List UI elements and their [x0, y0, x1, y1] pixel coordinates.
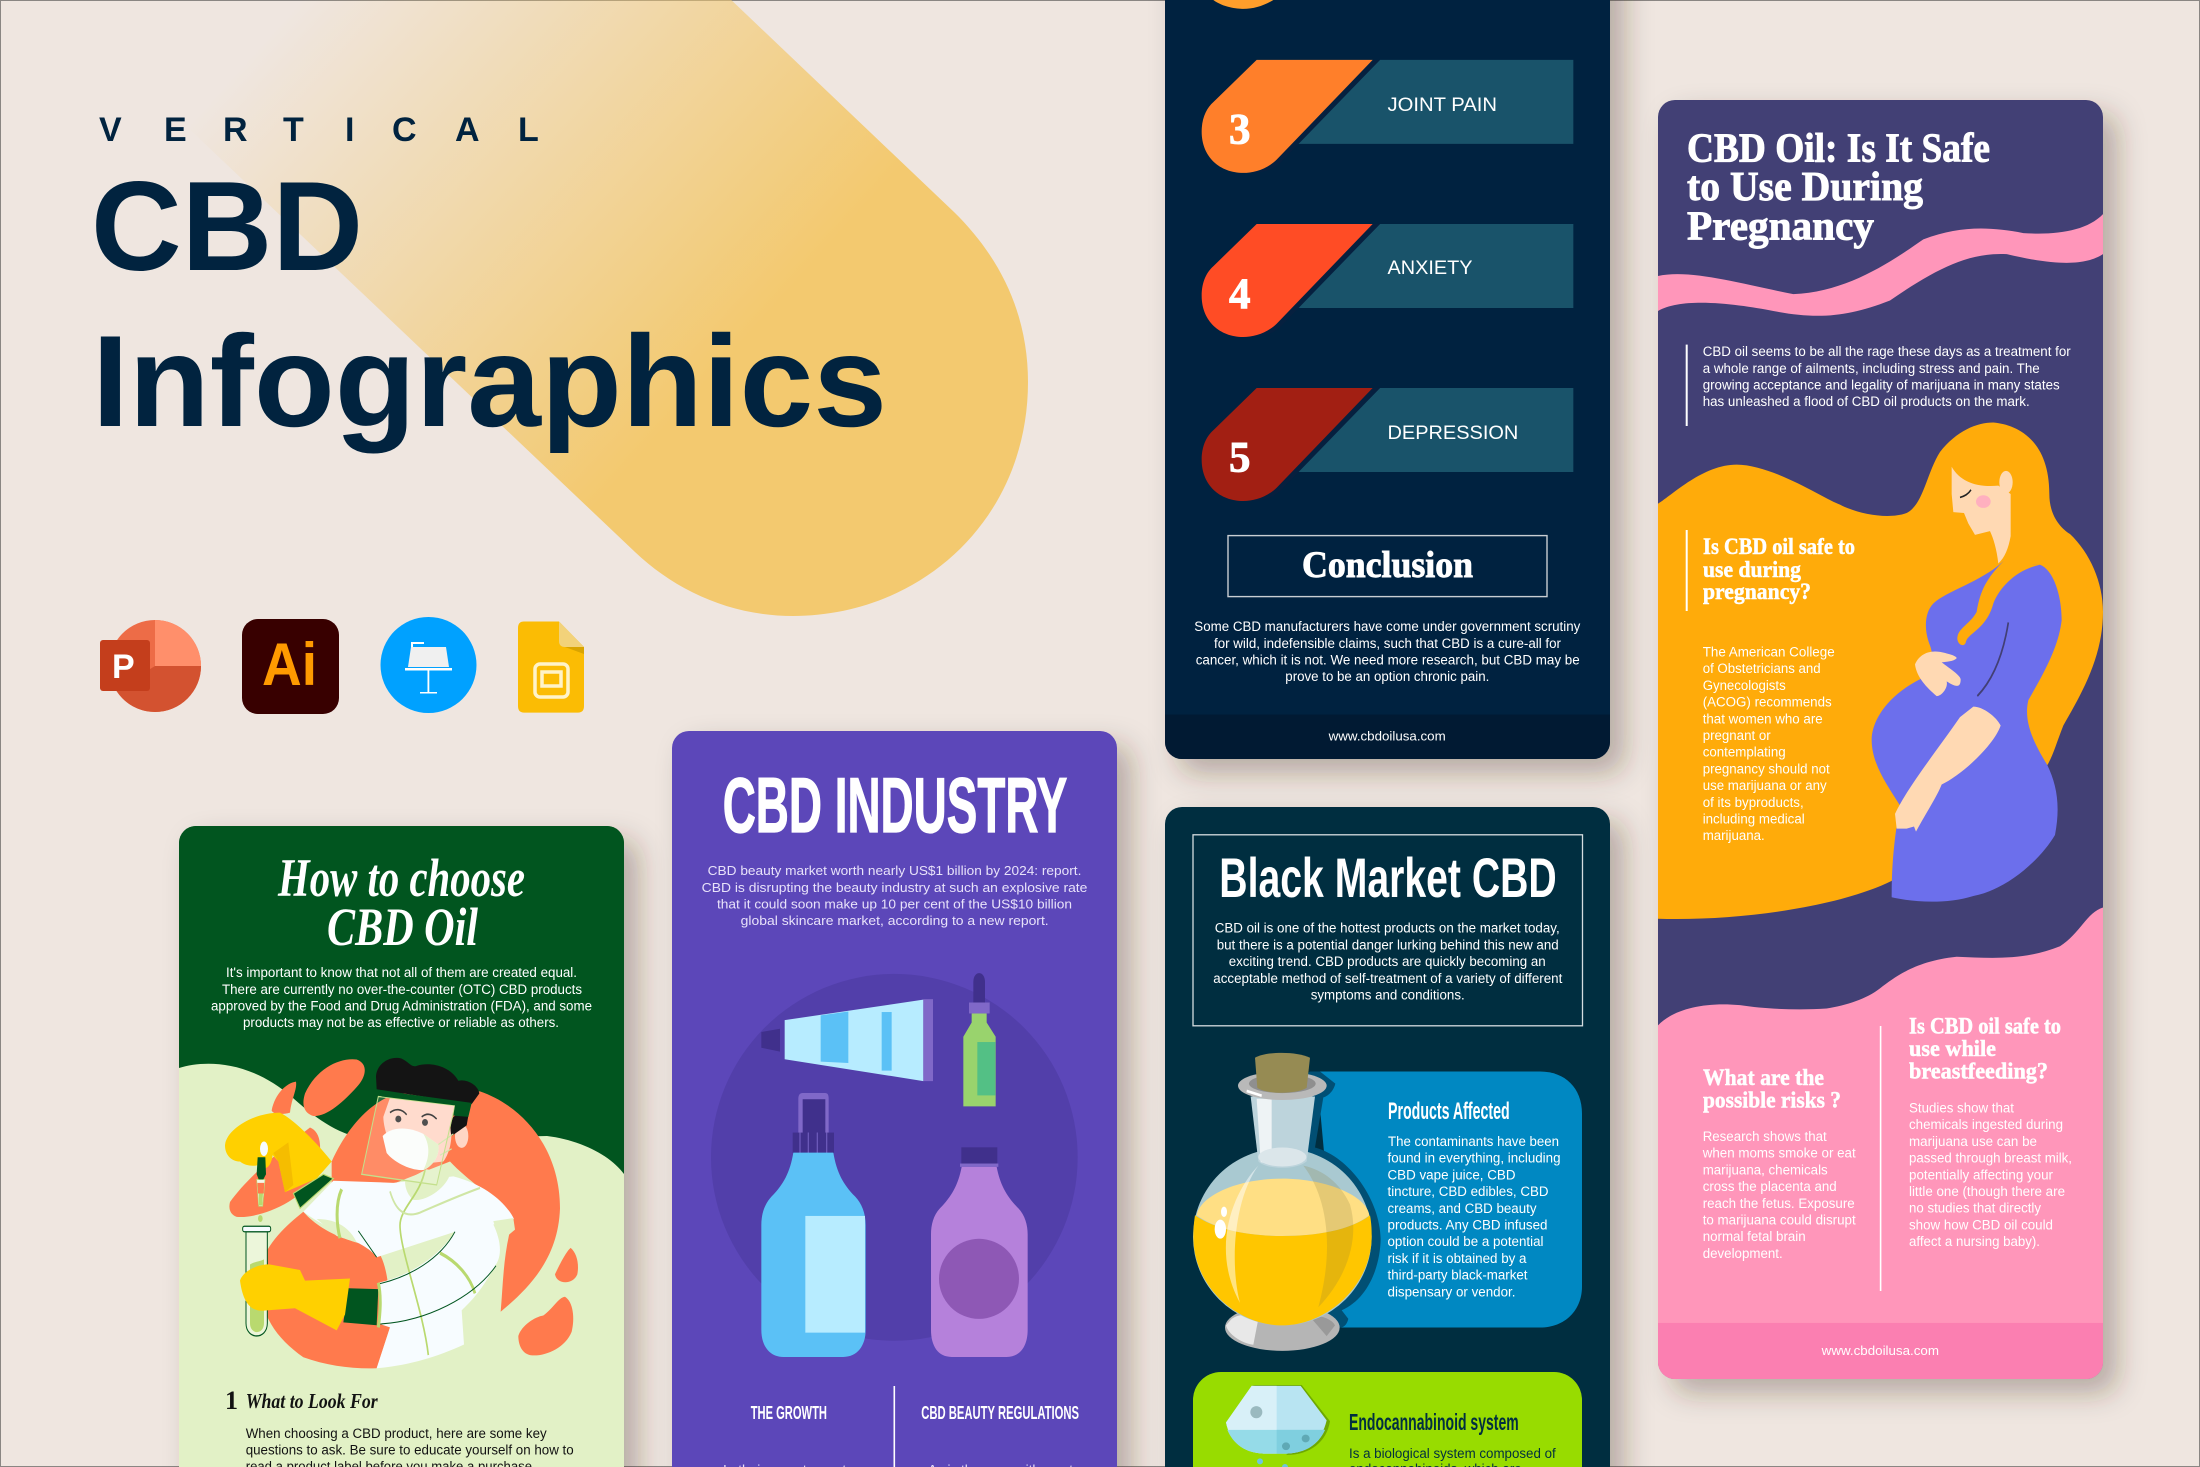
section text: When choosing a CBD product, here are some key [246, 1426, 547, 1441]
icon: PowerPoint [100, 620, 201, 712]
label: joint pain: JOINT PAIN [1388, 95, 1497, 116]
products affected text: dispensary or vendor. [1388, 1284, 1516, 1299]
intro text: global skincare market, according to a new report. [741, 913, 1049, 928]
column: possible risks: What are the [1703, 1065, 1824, 1090]
heading: pregnancy title [1687, 124, 1990, 248]
column: breastfeeding: little one (though there are [1909, 1184, 2065, 1199]
condition ribbons [1202, 0, 1573, 501]
intro text with rule [1686, 344, 2071, 426]
panel: CBD industry [672, 731, 1117, 1467]
column divider [1880, 1026, 1881, 1291]
icon: Illustrator: Ai [262, 631, 317, 698]
heading: CBD oil: CBD Oil [327, 897, 478, 957]
conclusion text: cancer, which it is not. We need more research, but CBD may be [1196, 652, 1580, 668]
column: breastfeeding: no studies that directly [1909, 1201, 2041, 1216]
panel: how to choose CBD oil [179, 826, 624, 1467]
question: safe during pregnancy: pregnancy? [1703, 579, 1811, 604]
answer text: ACOG: pregnancy should not [1703, 761, 1830, 776]
gloves and cuffs [293, 1174, 333, 1208]
heading: pregnancy title: CBD Oil: Is It Safe [1687, 124, 1990, 170]
answer text: ACOG: use marijuana or any [1703, 778, 1827, 793]
section text [246, 1426, 574, 1467]
intro text with rule: has unleashed a flood of CBD oil products on the mark. [1703, 394, 2030, 409]
conclusion box [1228, 536, 1547, 597]
number 3: 3 [1229, 106, 1250, 153]
green card: endocannabinoid system: Is a biological system composed of [1349, 1446, 1556, 1461]
intro text: It's important to know that not all of them are created equal. [226, 965, 577, 980]
answer text: ACOG: The American College [1703, 644, 1835, 660]
products affected text [1388, 1134, 1560, 1299]
icon: Keynote [380, 617, 476, 713]
label: anxiety: ANXIETY [1388, 258, 1473, 279]
answer text: ACOG: of Obstetricians and [1703, 661, 1821, 676]
intro text [211, 965, 592, 1030]
intro text: acceptable method of self-treatment of a variety of different [1213, 971, 1563, 986]
section text: questions to ask. Be sure to educate yourself on how to [246, 1443, 574, 1458]
intro text: CBD beauty market worth nearly US$1 billion by 2024: report. [708, 863, 1081, 878]
intro text with rule: growing acceptance and legality of marijuana in many states [1703, 378, 2060, 392]
number 4: 4 [1229, 271, 1250, 318]
intro text with rule: CBD oil seems to be all the rage these days as a treatment for [1703, 344, 2071, 359]
column: possible risks: cross the placenta and [1703, 1179, 1837, 1194]
blue bottle [798, 1093, 829, 1134]
section: the growth [723, 1403, 850, 1467]
column: possible risks: development. [1703, 1246, 1783, 1261]
intro text: approved by the Food and Drug Administration (FDA), and some [211, 998, 592, 1014]
products affected text: third-party black-market [1388, 1268, 1528, 1283]
dress [1872, 561, 2062, 902]
products affected text: risk if it is obtained by a [1388, 1251, 1527, 1266]
icon: Google Slides [518, 622, 584, 713]
section: the growth: THE GROWTH [751, 1403, 827, 1423]
products affected text: tincture, CBD edibles, CBD [1388, 1184, 1549, 1199]
question: safe during pregnancy: use during [1703, 557, 1801, 582]
column: breastfeeding: show how CBD oil could [1909, 1217, 2053, 1232]
intro text [702, 863, 1087, 928]
answer text: ACOG: pregnant or [1703, 728, 1771, 743]
panel: black market CBD [1165, 807, 1610, 1467]
footer url: www.cbdoilusa.com [1328, 729, 1446, 744]
answer text: ACOG [1703, 644, 1835, 843]
products affected text: option could be a potential [1388, 1234, 1544, 1249]
column: possible risks: normal fetal brain [1703, 1229, 1806, 1244]
column: possible risks: Research shows that [1703, 1129, 1827, 1144]
products affected text: CBD vape juice, CBD [1388, 1167, 1516, 1182]
illustration: scientist with dropper and test tube [225, 1058, 578, 1368]
icon: Illustrator [242, 619, 339, 714]
intro text: CBD oil is one of the hottest products on the market today, [1215, 920, 1560, 936]
tube [761, 1029, 780, 1052]
icon: PowerPoint: P [112, 648, 135, 686]
products affected text: products. Any CBD infused [1388, 1218, 1548, 1232]
question: safe during pregnancy [1686, 530, 1855, 611]
intro text: but there is a potential danger lurking behind this new and [1217, 937, 1559, 952]
heading: black market CBD: Black Market CBD [1219, 846, 1557, 909]
label: depression: DEPRESSION [1388, 423, 1518, 444]
answer text: ACOG: contemplating [1703, 745, 1786, 760]
section: CBD beauty regulations [921, 1403, 1079, 1467]
column: possible risks: reach the fetus. Exposure [1703, 1196, 1855, 1211]
column: possible risks [1702, 1065, 1856, 1261]
hair strand [1957, 561, 2040, 645]
panel: CBD oil pregnancy safety [1658, 100, 2103, 1384]
column: breastfeeding: potentially affecting your [1909, 1167, 2053, 1182]
heading: pregnancy title: Pregnancy [1687, 202, 1874, 248]
test tube [246, 1232, 267, 1336]
answer text: ACOG: marijuana. [1703, 828, 1765, 843]
question: safe during pregnancy: Is CBD oil safe to [1703, 534, 1855, 559]
intro text: There are currently no over-the-counter (OTC) CBD products [222, 982, 582, 997]
conclusion text: for wild, indefensible claims, such that CBD is a cure-all for [1214, 636, 1561, 651]
intro text with rule: a whole range of ailments, including stress and pain. The [1703, 361, 2040, 376]
illustration: oil flask with blue card [1193, 1053, 1582, 1351]
heading: Infographics: Infographics [92, 308, 887, 454]
heading: CBD industry: CBD INDUSTRY [723, 761, 1067, 849]
face [1952, 467, 2011, 563]
green card: endocannabinoid system: Endocannabinoid system [1349, 1409, 1519, 1435]
heading: CBD: CBD [91, 155, 363, 297]
heading: pregnancy title: to Use During [1687, 163, 1923, 209]
column: breastfeeding: Studies show that [1909, 1100, 2014, 1116]
intro text: products may not be as effective or reliable as others. [243, 1015, 559, 1030]
conclusion text: prove to be an option chronic pain. [1285, 669, 1489, 684]
hands [1915, 651, 1961, 696]
section heading: what to look for: What to Look For [246, 1389, 378, 1413]
answer text: ACOG: Gynecologists [1703, 678, 1786, 693]
answer text: ACOG: that women who are [1703, 711, 1823, 726]
number 5: 5 [1229, 434, 1250, 482]
column: possible risks: marijuana, chemicals [1703, 1162, 1828, 1177]
purple bottle [961, 1147, 997, 1164]
section heading: what to look for [227, 1392, 378, 1409]
column: breastfeeding: breastfeeding? [1909, 1058, 2048, 1083]
heading: how to choose: How to choose [277, 848, 525, 908]
intro text: symptoms and conditions. [1311, 987, 1465, 1002]
answer text: ACOG: (ACOG) recommends [1703, 695, 1832, 710]
subtitle: vertical: VERTICAL [99, 111, 539, 149]
column: breastfeeding: passed through breast milk, [1909, 1151, 2072, 1166]
pink lower section with footer [1658, 908, 2103, 1384]
column: breastfeeding: affect a nursing baby). [1909, 1234, 2040, 1249]
conclusion text: Some CBD manufacturers have come under government scrutiny [1194, 619, 1581, 634]
column: possible risks: when moms smoke or eat [1702, 1146, 1856, 1161]
illustration: waves and pregnant woman [1658, 214, 2103, 919]
belly line [1977, 622, 2008, 696]
section: CBD beauty regulations: CBD BEAUTY REGULATIONS [921, 1403, 1079, 1423]
column divider [894, 1386, 895, 1467]
intro text: exciting trend. CBD products are quickly becoming an [1229, 954, 1546, 969]
products affected text: The contaminants have been [1388, 1134, 1559, 1149]
column: breastfeeding: use while [1909, 1036, 1996, 1061]
heading: products affected: Products Affected [1388, 1098, 1510, 1125]
conclusion text [1194, 619, 1581, 684]
intro text: CBD is disrupting the beauty industry at such an explosive rate [702, 880, 1087, 895]
column: breastfeeding: chemicals ingested during [1909, 1117, 2063, 1132]
products affected text: creams, and CBD beauty [1388, 1201, 1537, 1216]
column: possible risks: to marijuana could disrupt [1703, 1212, 1856, 1228]
panel background wave [179, 1064, 624, 1467]
intro text: that it could soon make up 10 per cent of the US$10 billion [717, 897, 1072, 912]
panel: health conditions and conclusion [1165, 0, 1610, 760]
intro text [1213, 920, 1563, 1002]
title [91, 111, 887, 454]
section heading: what to look for: 1 [225, 1386, 238, 1415]
illustration: cosmetic bottles [711, 973, 1078, 1357]
answer text: ACOG: including medical [1703, 812, 1805, 826]
dropper [973, 973, 985, 1003]
column: breastfeeding: Is CBD oil safe to [1909, 1013, 2061, 1038]
footer band [1165, 715, 1610, 760]
products affected text: found in everything, including [1388, 1151, 1560, 1166]
column: breastfeeding [1909, 1013, 2072, 1249]
answer text: ACOG: of its byproducts, [1703, 795, 1804, 810]
column: possible risks: possible risks ? [1703, 1087, 1841, 1112]
green card: endocannabinoid system [1193, 1372, 1582, 1467]
footer url: www.cbdoilusa.com [1821, 1343, 1939, 1358]
column: breastfeeding: marijuana use can be [1909, 1134, 2037, 1149]
title box [1193, 835, 1582, 1026]
face [383, 1098, 455, 1166]
decorative yellow rounded band [48, 0, 1028, 616]
conclusion box: Conclusion [1302, 545, 1473, 586]
